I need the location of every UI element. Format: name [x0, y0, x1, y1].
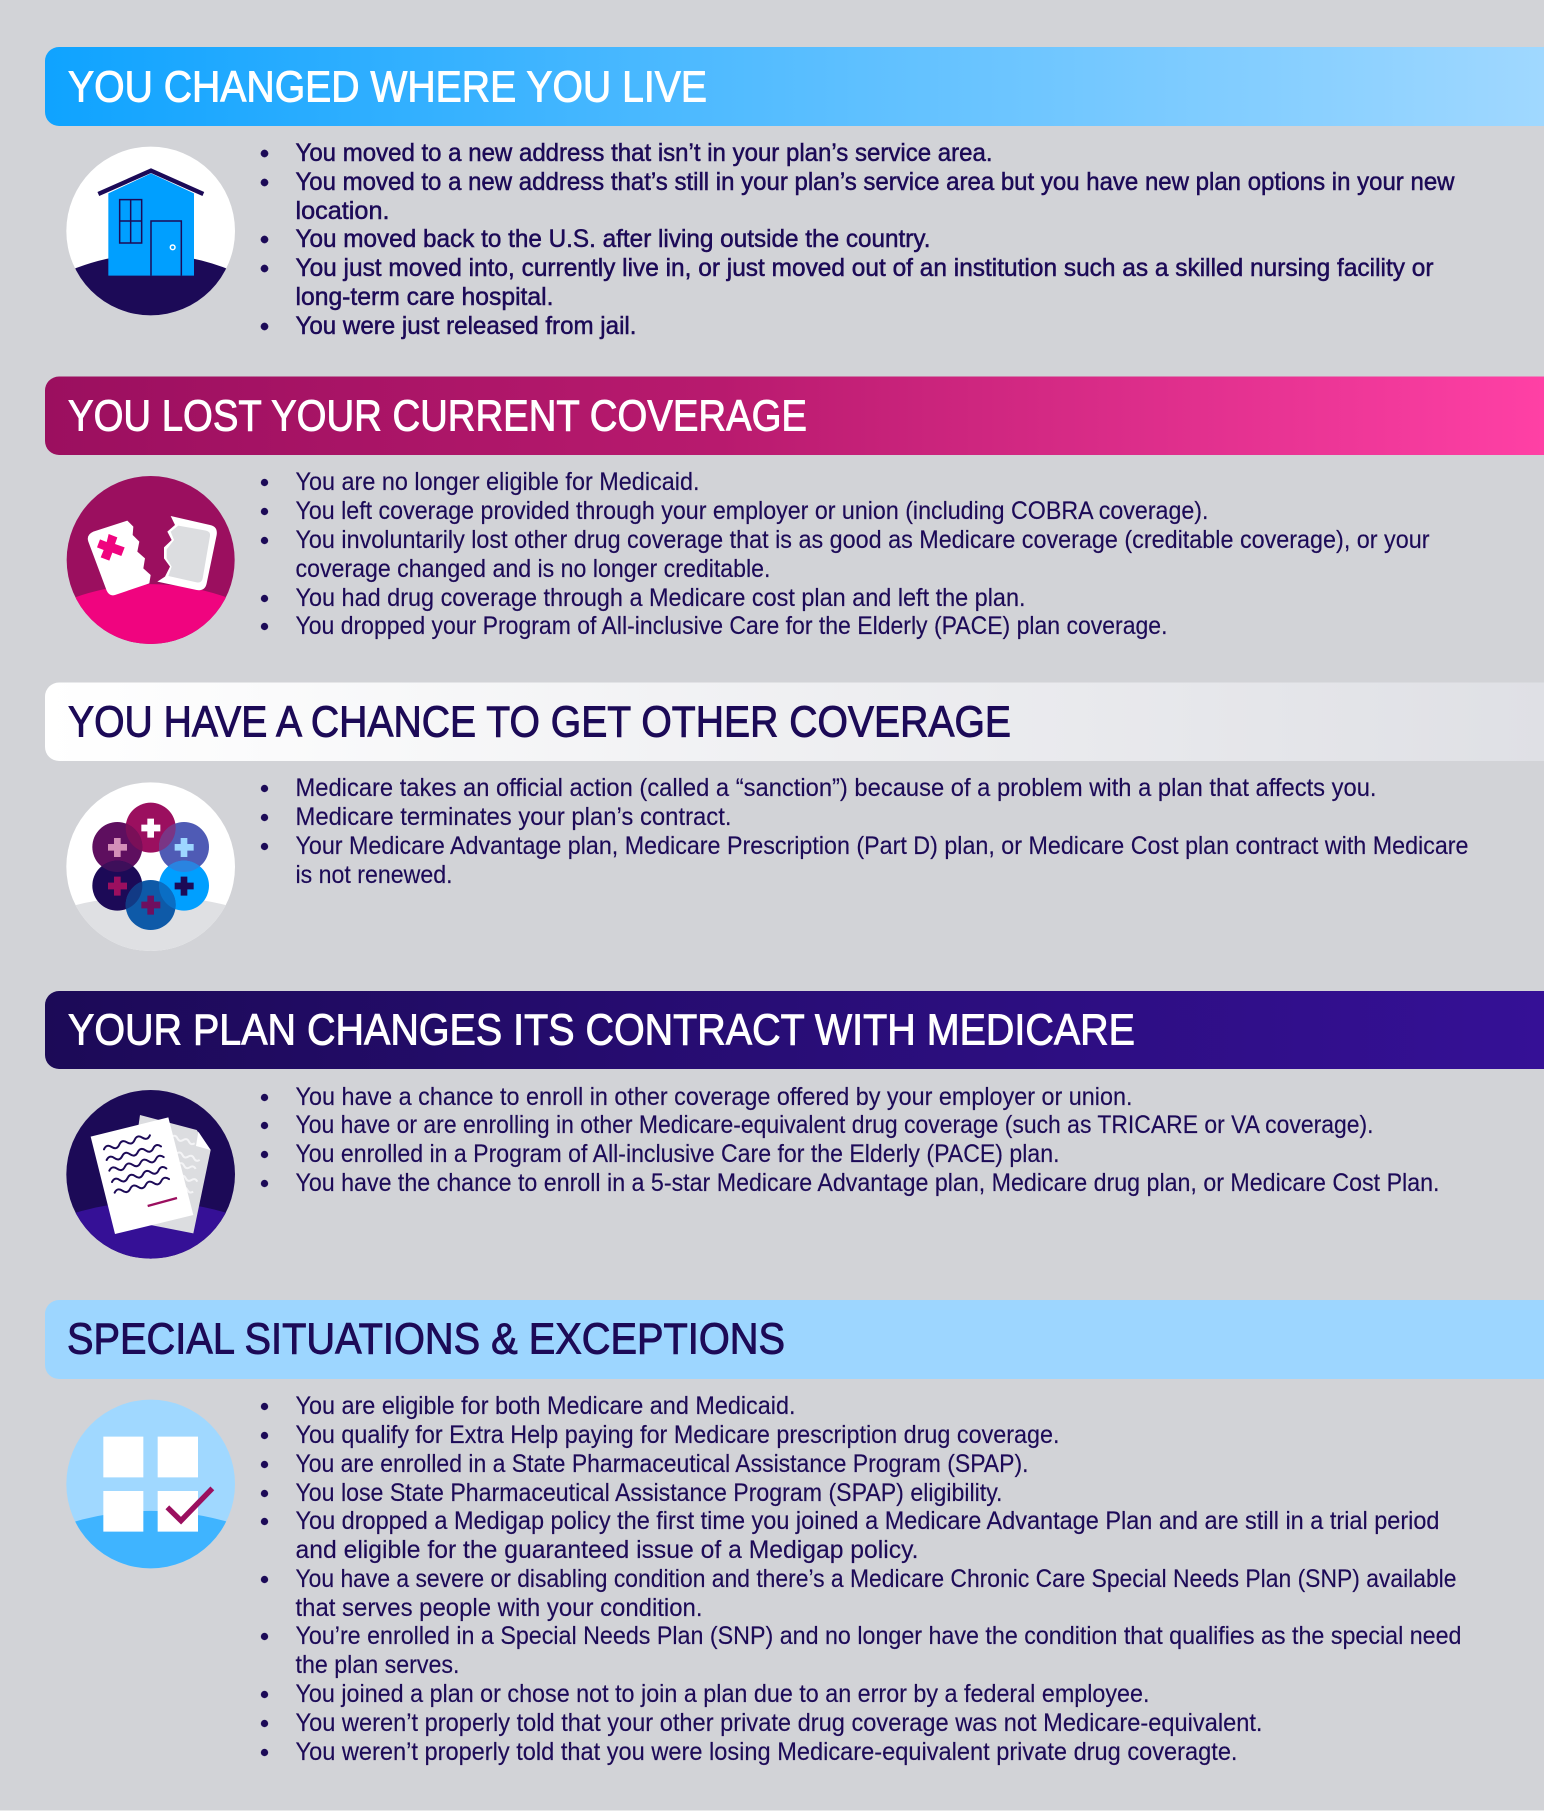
- icon: house: [66, 146, 235, 316]
- bullet list: you lost your current coverage: coverage changed and is no longer creditable.: [296, 555, 770, 583]
- icon: contract documents: [66, 1090, 235, 1259]
- banner: you lost your current coverage: [45, 376, 1544, 455]
- bullet list: your plan changes its contract with medicare: [261, 1083, 1439, 1197]
- bullet list: special situations and exceptions: You’re enrolled in a Special Needs Plan (SNP) and no longer have the condition that qualifies as the special need: [296, 1622, 1462, 1650]
- heading: you changed where you live: YOU CHANGED WHERE YOU LIVE: [68, 62, 707, 112]
- bullet list: special situations and exceptions: You qualify for Extra Help paying for Medicare prescription drug coverage.: [296, 1421, 1060, 1449]
- bullet list: special situations and exceptions: You joined a plan or chose not to join a plan due to an error by a federal employee.: [296, 1680, 1150, 1708]
- bullet list: special situations and exceptions: You are eligible for both Medicare and Medicaid.: [296, 1392, 796, 1420]
- banner: special situations and exceptions: [45, 1300, 1544, 1379]
- bullet list: special situations and exceptions: [261, 1392, 1461, 1766]
- banner: you changed where you live: [45, 47, 1544, 126]
- bullet list: special situations and exceptions: that serves people with your condition.: [296, 1594, 702, 1622]
- bullet list: your plan changes its contract with medicare: You enrolled in a Program of All-inclusive Care for the Elderly (PACE) plan.: [296, 1140, 1060, 1168]
- bullet list: you lost your current coverage: You had drug coverage through a Medicare cost plan and left the plan.: [296, 584, 1026, 612]
- bullet list: you changed where you live: You moved back to the U.S. after living outside the country.: [296, 225, 930, 253]
- banner: your plan changes its contract with medicare: [45, 991, 1544, 1069]
- bullet list: you lost your current coverage: You dropped your Program of All-inclusive Care for the Elderly (PACE) plan coverage.: [296, 612, 1168, 640]
- bullet list: your plan changes its contract with medicare: You have a chance to enroll in other coverage offered by your employer or union.: [296, 1083, 1132, 1111]
- bullet list: special situations and exceptions: and eligible for the guaranteed issue of a Medigap policy.: [296, 1536, 918, 1564]
- icon: ring of medical circles: [66, 782, 235, 951]
- panel: your plan changes its contract with medicare: [45, 991, 1544, 1280]
- bullet list: you have a chance to get other coverage: Your Medicare Advantage plan, Medicare Prescription (Part D) plan, or Medicare Cost plan contract with Medicare: [296, 832, 1468, 860]
- bullet list: special situations and exceptions: You weren’t properly told that you were losing Medicare-equivalent private drug coveragte.: [296, 1738, 1238, 1766]
- icon: torn insurance card: [66, 476, 235, 644]
- bullet list: you have a chance to get other coverage: Medicare takes an official action (called a “sanction”) because of a problem with a plan that affects you.: [296, 774, 1376, 802]
- bullet list: your plan changes its contract with medicare: You have or are enrolling in other Medicare-equivalent drug coverage (such as TRICARE or VA coverage).: [296, 1111, 1374, 1139]
- bullet list: special situations and exceptions: You are enrolled in a State Pharmaceutical Assistance Program (SPAP).: [296, 1450, 1028, 1478]
- heading: you lost your current coverage: YOU LOST YOUR CURRENT COVERAGE: [68, 392, 807, 440]
- bullet list: special situations and exceptions: You have a severe or disabling condition and there’s a Medicare Chronic Care Special Needs Plan (SNP) available: [296, 1565, 1456, 1593]
- bullet list: you have a chance to get other coverage: Medicare terminates your plan’s contract.: [296, 803, 732, 831]
- banner: you have a chance to get other coverage: [45, 682, 1544, 761]
- bullet list: you lost your current coverage: You involuntarily lost other drug coverage that is as good as Medicare coverage (creditable coverage), or your: [296, 526, 1430, 554]
- bullet list: you lost your current coverage: You are no longer eligible for Medicaid.: [296, 468, 700, 496]
- bullet list: you changed where you live: [261, 139, 1455, 340]
- bullet list: your plan changes its contract with medicare: You have the chance to enroll in a 5-star Medicare Advantage plan, Medicare drug plan, or Medicare Cost Plan.: [296, 1169, 1440, 1197]
- panel: you changed where you live: [45, 47, 1544, 340]
- bullet list: you changed where you live: You moved to a new address that isn’t in your plan’s service area.: [296, 139, 992, 167]
- bullet list: you lost your current coverage: You left coverage provided through your employer or union (including COBRA coverage).: [296, 497, 1208, 525]
- bullet list: you changed where you live: You were just released from jail.: [296, 312, 636, 340]
- icon: checklist grid: [66, 1400, 235, 1568]
- bullet list: special situations and exceptions: the plan serves.: [296, 1651, 460, 1679]
- panel: you have a chance to get other coverage: [45, 682, 1544, 970]
- bullet list: you changed where you live: You just moved into, currently live in, or just moved out of an institution such as a skilled nursing facility or: [296, 254, 1434, 282]
- heading: special situations and exceptions: SPECIAL SITUATIONS & EXCEPTIONS: [67, 1314, 785, 1364]
- bullet list: special situations and exceptions: You dropped a Medigap policy the first time you joined a Medicare Advantage Plan and are still in a trial period: [296, 1507, 1440, 1535]
- panel: special situations and exceptions: [45, 1300, 1544, 1766]
- bullet list: special situations and exceptions: You lose State Pharmaceutical Assistance Program (SPAP) eligibility.: [296, 1479, 1002, 1507]
- heading: your plan changes its contract with medicare: YOUR PLAN CHANGES ITS CONTRACT WITH MEDICARE: [68, 1006, 1135, 1054]
- heading: you have a chance to get other coverage: YOU HAVE A CHANCE TO GET OTHER COVERAGE: [68, 698, 1011, 746]
- panel: you lost your current coverage: [45, 376, 1544, 660]
- bullet list: special situations and exceptions: You weren’t properly told that your other private drug coverage was not Medicare-equivalent.: [296, 1709, 1262, 1737]
- bullet list: you changed where you live: long-term care hospital.: [296, 283, 554, 311]
- bullet list: you changed where you live: You moved to a new address that’s still in your plan’s service area but you have new plan options in your new: [296, 168, 1455, 196]
- bullet list: you have a chance to get other coverage: is not renewed.: [296, 861, 452, 889]
- bullet list: you have a chance to get other coverage: [261, 774, 1468, 889]
- bullet list: you changed where you live: location.: [296, 197, 390, 225]
- bullet list: you lost your current coverage: [261, 468, 1429, 640]
